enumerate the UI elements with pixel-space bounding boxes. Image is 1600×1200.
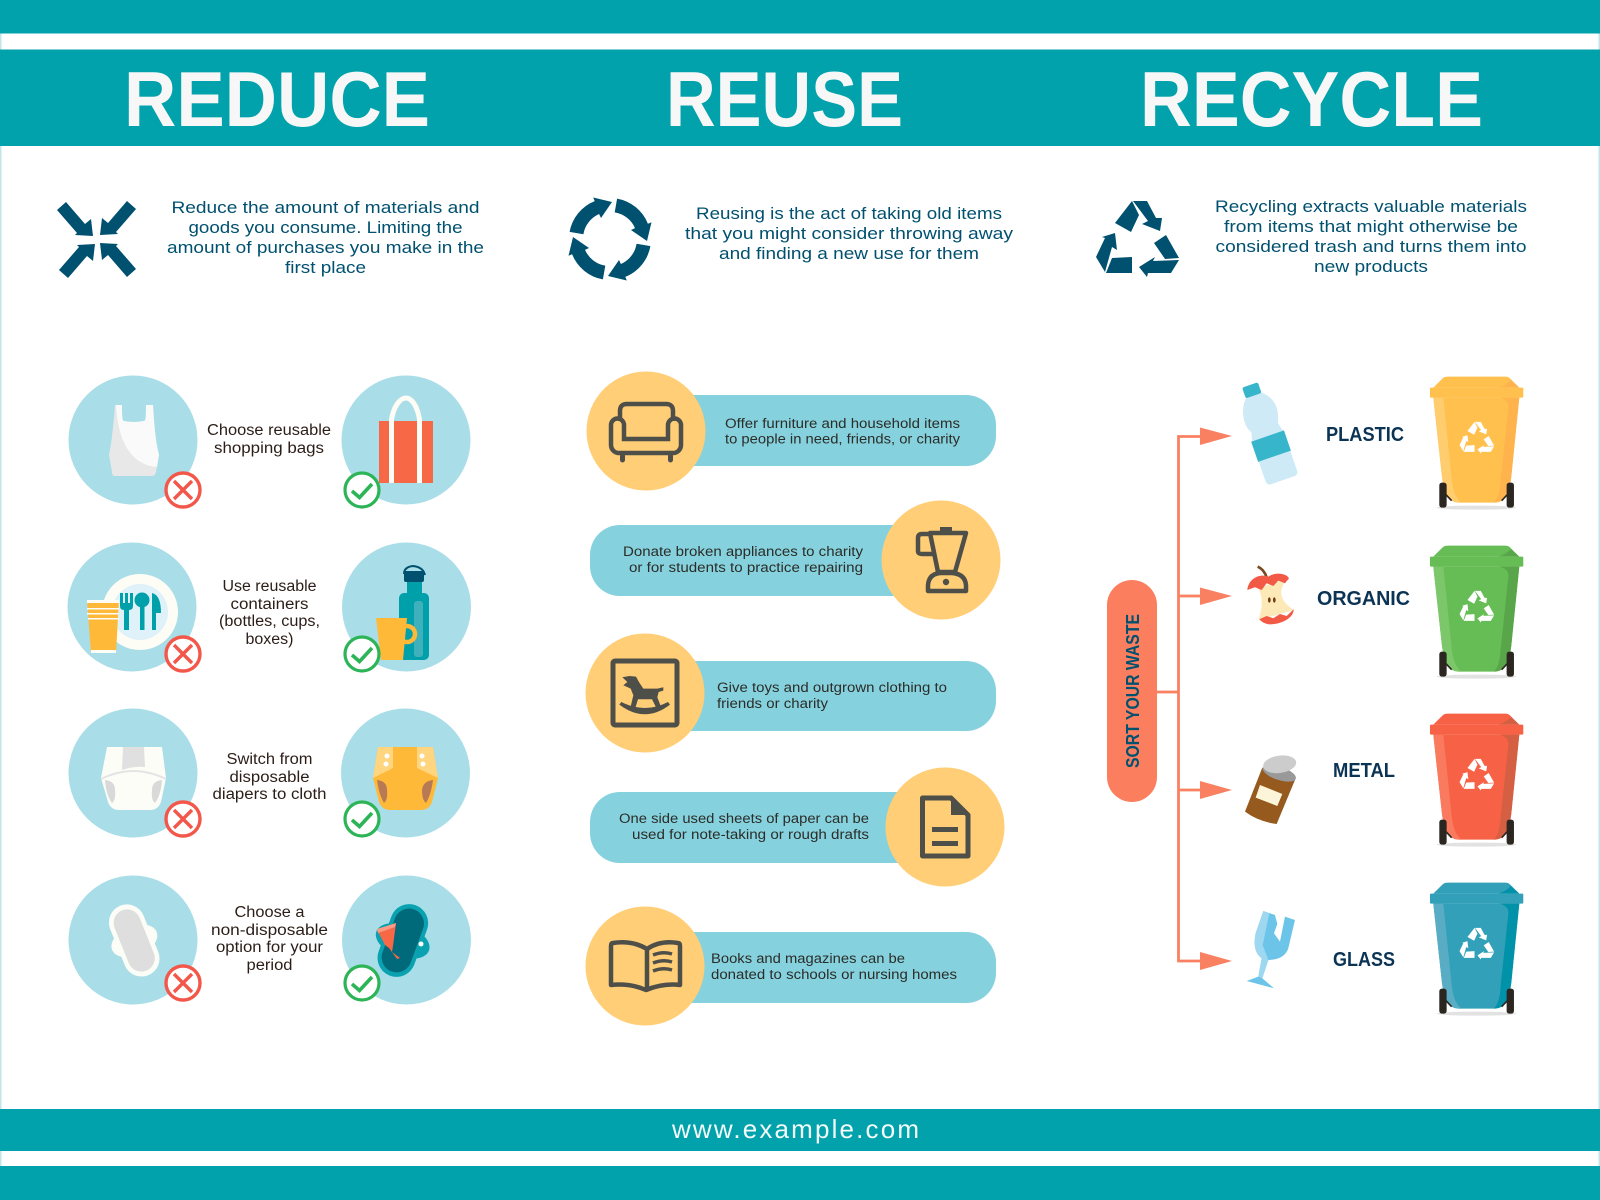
text: books tip: donated to schools or nursing homes: [711, 967, 957, 982]
text: furniture tip: Offer furniture and household items: [725, 416, 960, 431]
icon: plastic bottle: [1234, 379, 1300, 486]
connector lines and arrows: [1157, 428, 1232, 970]
icon: disposable diaper: [101, 747, 166, 810]
text: diapers tip: [212, 751, 326, 803]
text: reduce description: [167, 198, 484, 277]
text: period tip: period: [246, 957, 292, 974]
text: appliances tip: or for students to practice repairing: [629, 560, 863, 575]
icon: sofa: [611, 404, 681, 460]
text: reduce description: goods you consume. Limiting the: [188, 218, 462, 237]
panel: reuse row 3 toys: [586, 634, 996, 752]
panel: reduce row 4 period products: [68, 876, 471, 1004]
icon: check badge: [345, 473, 379, 507]
icon: x badge: [166, 637, 200, 671]
text: furniture tip: [725, 416, 960, 446]
text: sort your waste: SORT YOUR WASTE: [1123, 614, 1143, 768]
panel: reduce row 3 diapers: [68, 708, 470, 838]
icon: check badge: [345, 802, 379, 836]
text: diapers tip: Switch from: [226, 751, 312, 768]
text: toys tip: Give toys and outgrown clothing to: [717, 680, 947, 695]
text: period tip: option for your: [216, 939, 323, 956]
header band: [0, 50, 1600, 146]
top stripe: [0, 0, 1600, 34]
text: reduce description: amount of purchases you make in the: [167, 238, 484, 257]
text: reuse description: and finding a new use for them: [719, 244, 979, 263]
text: containers tip: Use reusable: [222, 578, 316, 595]
panel: reduce row 2 containers: [68, 542, 471, 672]
text: containers tip: (bottles, cups,: [219, 613, 320, 630]
panel: reduce row 1 bags: [68, 376, 470, 507]
text: diapers tip: diapers to cloth: [212, 786, 326, 803]
text: furniture tip: to people in need, friends, or charity: [725, 432, 960, 446]
heading: reuse: REUSE: [666, 55, 903, 143]
text: containers tip: boxes): [246, 631, 294, 648]
text: reuse description: that you might consider throwing away: [685, 224, 1014, 243]
icon: plate, cup and cutlery: [87, 574, 178, 653]
icon: yellow bin: [1430, 377, 1523, 510]
bottom stripe: [0, 1166, 1600, 1200]
text: period tip: Choose a: [234, 904, 305, 921]
text: recycle description: [1215, 197, 1527, 276]
icon: check badge: [345, 966, 379, 1000]
icon: metal can: [1245, 753, 1298, 824]
icon: bottle and mug: [376, 566, 429, 660]
text: recycle description: new products: [1314, 257, 1428, 276]
text: reduce description: first place: [285, 258, 366, 277]
footer band: [0, 1109, 1600, 1151]
icon: recycling triangle: [1096, 201, 1179, 277]
text: recycle description: considered trash and turns them into: [1216, 237, 1526, 256]
text: paper tip: [619, 811, 869, 842]
icon: check badge: [345, 637, 379, 671]
panel: reuse row 5 books: [586, 906, 996, 1026]
sort pill: [1107, 580, 1157, 802]
text: period tip: [211, 904, 328, 974]
text: reduce description: Reduce the amount of materials and: [172, 198, 480, 217]
text: glass: GLASS: [1333, 949, 1395, 971]
panel: reuse row 2 appliances: [590, 500, 1000, 620]
icon: green bin: [1430, 546, 1523, 679]
text: toys tip: friends or charity: [717, 696, 828, 711]
text: website: www.example.com: [671, 1114, 919, 1144]
text: bags tip: [207, 422, 331, 457]
text: bags tip: Choose reusable: [207, 422, 331, 439]
icon: document: [922, 796, 970, 856]
icon: rocking horse: [613, 661, 677, 725]
panel: reuse row 1 furniture: [586, 372, 996, 490]
text: plastic: PLASTIC: [1326, 424, 1404, 446]
icon: plastic bag: [109, 405, 159, 476]
heading: recycle: RECYCLE: [1140, 55, 1483, 143]
text: books tip: Books and magazines can be: [711, 951, 905, 966]
icon: blue bin: [1430, 883, 1523, 1016]
text: organic: ORGANIC: [1317, 588, 1410, 610]
text: recycle description: from items that might otherwise be: [1224, 217, 1518, 236]
icon: circular arrows: [568, 198, 652, 280]
text: reuse description: Reusing is the act of taking old items: [696, 204, 1002, 223]
panel: reuse row 4 paper: [590, 768, 1004, 886]
text: appliances tip: [623, 544, 863, 575]
icon: red bin: [1430, 714, 1523, 847]
text: diapers tip: disposable: [230, 769, 310, 786]
text: books tip: [711, 951, 957, 982]
text: bags tip: shopping bags: [214, 440, 324, 457]
panel: sort your waste tree: [1107, 428, 1232, 970]
icon: x badge: [166, 473, 200, 507]
text: period tip: non-disposable: [211, 922, 328, 939]
heading: reduce: REDUCE: [124, 55, 430, 143]
text: containers tip: containers: [230, 596, 309, 613]
text: appliances tip: Donate broken appliances to charity: [623, 544, 863, 559]
text: paper tip: used for note-taking or rough drafts: [632, 827, 869, 842]
icon: broken glass: [1247, 911, 1295, 988]
icon: apple core: [1247, 567, 1294, 624]
icon: inward arrows: [57, 201, 136, 278]
icon: open book: [611, 942, 680, 990]
icon: x badge: [166, 966, 200, 1000]
icon: cloth diaper: [373, 747, 438, 810]
text: recycle description: Recycling extracts valuable materials: [1215, 197, 1527, 216]
text: metal: METAL: [1333, 760, 1395, 782]
text: reuse description: [685, 204, 1014, 263]
icon: tote bag: [379, 398, 433, 483]
text: paper tip: One side used sheets of paper can be: [619, 811, 869, 826]
text: containers tip: [219, 578, 320, 648]
icon: x badge: [166, 802, 200, 836]
icon: cloth pad and cup: [364, 896, 442, 985]
icon: disposable pad: [98, 897, 170, 984]
text: toys tip: [717, 680, 947, 711]
icon: blender: [918, 527, 966, 591]
